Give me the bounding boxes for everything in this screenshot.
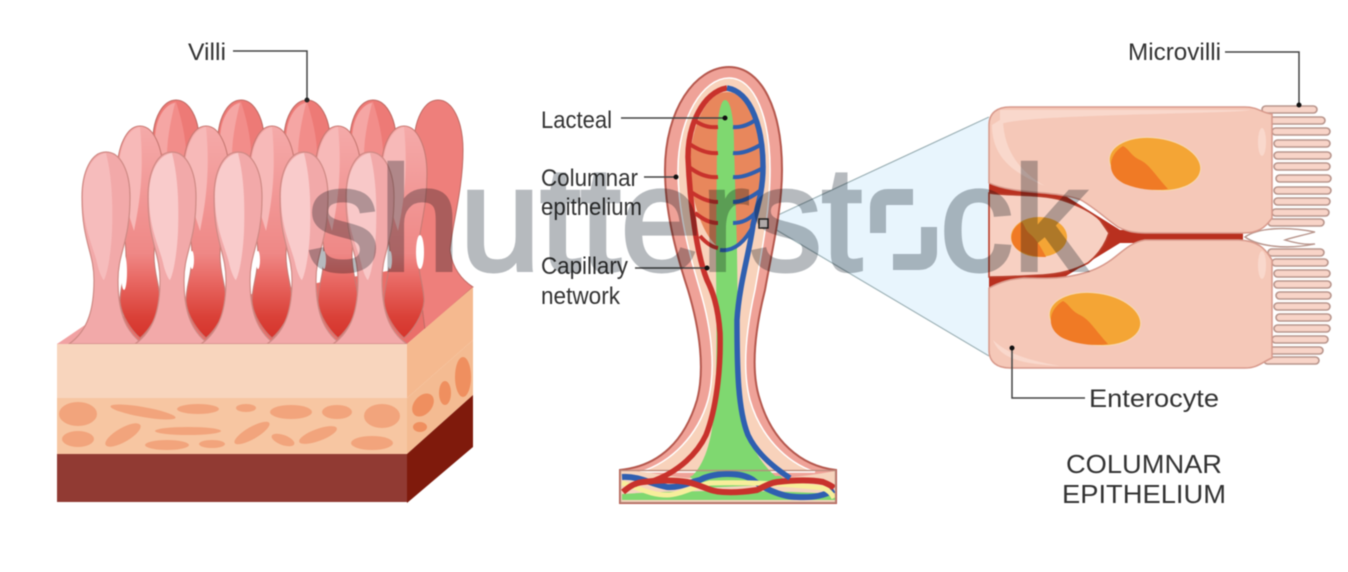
block side face	[407, 287, 473, 503]
title: Columnar epithelium: COLUMNAR	[1066, 449, 1222, 479]
small middle enterocyte	[989, 193, 1109, 277]
label: Capillary network	[541, 253, 710, 310]
microvilli lower	[1264, 249, 1331, 364]
lower enterocyte	[989, 240, 1272, 368]
lower nucleus	[1046, 287, 1144, 351]
cell junction backing	[989, 180, 1243, 292]
front row of villi	[57, 152, 407, 344]
label: Villi	[188, 39, 310, 102]
label: Enterocyte: Enterocyte	[1089, 385, 1219, 413]
lacteal	[685, 100, 780, 492]
panel: enterocyte cells	[989, 106, 1331, 368]
panel: single villus cross-section	[620, 67, 836, 503]
upper nucleus	[1106, 132, 1204, 196]
title: Columnar epithelium: EPITHELIUM	[1062, 479, 1226, 509]
villus outer wall	[620, 67, 836, 503]
red capillary	[650, 88, 727, 482]
label: Villi: Villi	[188, 39, 226, 66]
orange core	[690, 92, 763, 250]
label: Enterocyte	[1010, 346, 1219, 413]
zoom marker square	[759, 219, 768, 228]
watermark: ck	[940, 137, 1087, 302]
gaps between villi	[121, 235, 424, 290]
label: Columnar epithelium: epithelium	[541, 194, 642, 221]
villus inner layer	[640, 78, 815, 472]
label: Columnar epithelium: Columnar	[541, 165, 638, 192]
label: Microvilli: Microvilli	[1128, 39, 1221, 66]
cell highlights	[992, 110, 1266, 366]
title: Columnar epithelium	[1062, 449, 1226, 509]
microvilli upper	[1262, 106, 1331, 226]
label: Columnar epithelium	[541, 165, 678, 221]
panel: villi tissue block	[57, 100, 473, 503]
base connective strip	[620, 470, 836, 502]
watermark: shutterst	[307, 137, 862, 302]
label: Capillary network: Capillary	[541, 253, 628, 280]
block front face	[57, 344, 407, 502]
label: Lacteal: Lacteal	[541, 107, 612, 134]
zoom cone	[763, 117, 989, 356]
label: Microvilli	[1128, 39, 1302, 108]
back row of villi	[153, 100, 473, 330]
middle row of villi	[117, 126, 427, 338]
blue capillary	[720, 88, 790, 478]
small nucleus	[1011, 217, 1067, 257]
label: Capillary network: network	[541, 283, 621, 310]
white gap between cells	[1245, 229, 1315, 247]
villi surface base	[57, 262, 473, 344]
upper enterocyte	[989, 107, 1272, 233]
label: Lacteal	[541, 107, 728, 134]
